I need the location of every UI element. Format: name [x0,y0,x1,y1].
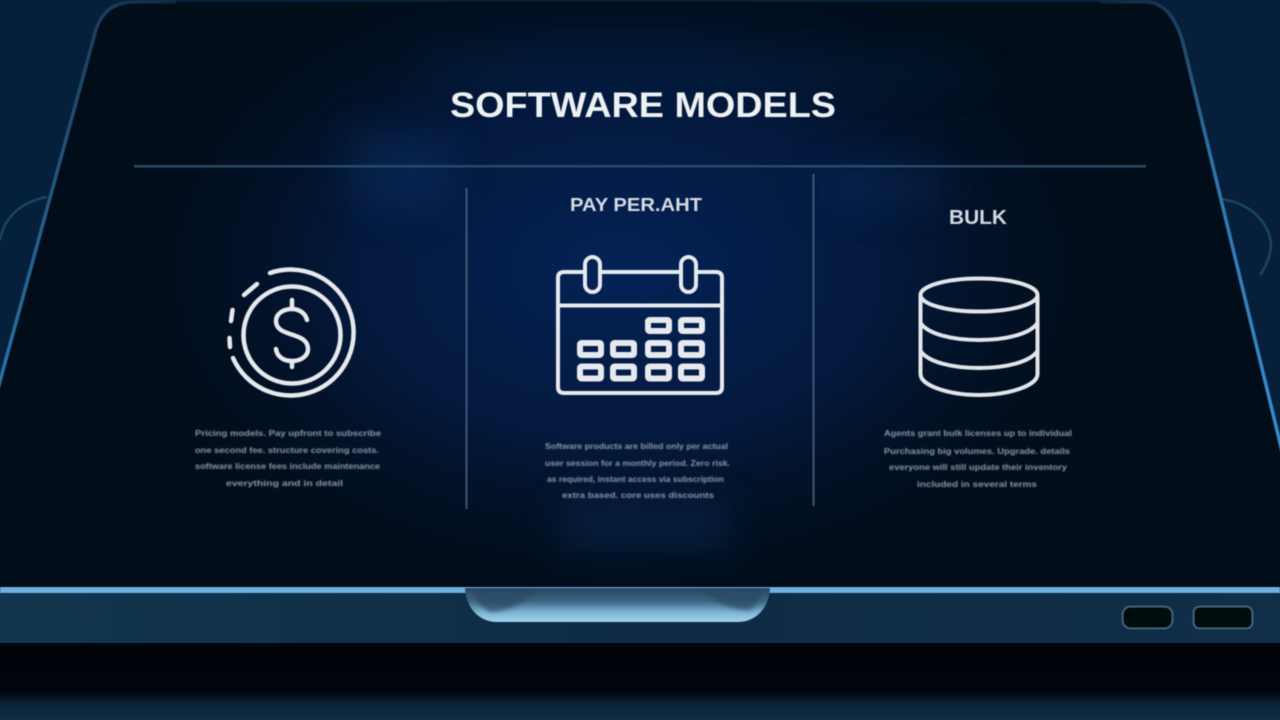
title: SOFTWARE MODELS [450,86,836,125]
lid notch [465,588,770,622]
column dividers [466,174,814,509]
heading: pay per unit: PAY PER.AHT [570,195,702,215]
heading: bulk: BULK [949,207,1008,229]
body text: pay per unit: extra based. core uses discounts [562,491,715,500]
body text: pricing: everything and in detail [226,479,343,488]
side hinges [0,197,1271,275]
panel: bulk column [884,207,1072,489]
glowing edge [0,587,1280,593]
light streaks [350,62,980,550]
shadow under laptop [0,643,1280,720]
icon: calendar [558,257,722,393]
body text: bulk: everyone will still update their inventory [889,463,1068,472]
title divider [134,165,1146,168]
icon: database [920,278,1038,395]
screen edge right [1100,2,1280,455]
panel: pay per unit column [545,195,730,500]
body text: pricing: software license fees include maintenance [195,462,381,471]
body text: bulk: included in several terms [917,480,1038,489]
port right [1194,606,1252,628]
body text: bulk: Agents grant bulk licenses up to individual [884,429,1072,438]
body text: bulk: Purchasing big volumes. Upgrade. details [884,447,1071,456]
body text: pay per unit: as required, instant access via subscription [547,475,724,484]
screen edge left [0,2,176,392]
panel: pricing column [195,270,382,488]
body text: pricing [195,429,382,488]
icon: dollar coin [230,270,354,396]
body text: pay per unit: user session for a monthly period. Zero risk. [545,459,730,468]
body text: pricing: one second fee. structure covering costs. [195,446,379,455]
laptop base [0,587,1280,643]
body text: pay per unit [545,442,730,500]
screen glow [100,6,1180,584]
body text: pricing: Pricing models. Pay upfront to subscribe [195,429,382,438]
body text: pay per unit: Software products are billed only per actual [545,442,728,451]
port left [1122,606,1172,628]
body text: bulk [884,429,1072,489]
